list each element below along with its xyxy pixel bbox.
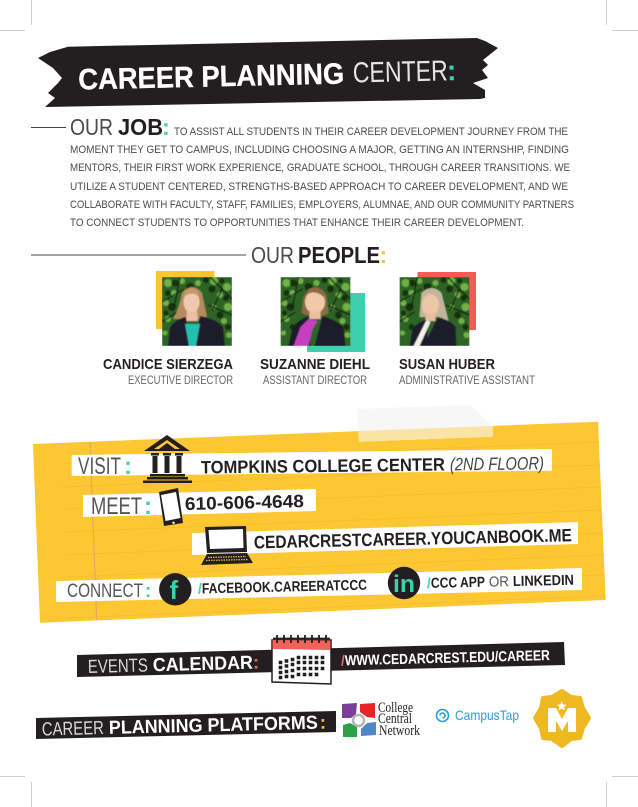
name: SUSAN HUBER — [399, 356, 495, 373]
phone number: 610-606-4648 — [185, 491, 304, 514]
linkedin handle: /CCC APPORLINKEDIN — [427, 573, 574, 592]
logo wordmark — [378, 700, 420, 739]
body text: TO ASSIST ALL STUDENTS IN THEIR CAREER DEVELOPMENT JOURNEY FROM THE — [174, 126, 568, 138]
meet colon: : — [144, 493, 152, 520]
row: meet — [83, 489, 316, 520]
body text: UTILIZE A STUDENT CENTERED, STRENGTHS-BASED APPROACH TO CAREER DEVELOPMENT, AND WE — [70, 181, 568, 193]
logo wordmark: College — [378, 700, 413, 716]
person: Candice Sierzega — [103, 271, 233, 387]
name: CANDICE SIERZEGA — [103, 356, 233, 373]
logo: CampusTap — [436, 707, 519, 723]
section: our people heading: : — [380, 242, 387, 268]
address: TOMPKINS COLLEGE CENTER(2ND FLOOR) — [201, 453, 544, 477]
logo: College Central Network — [342, 700, 420, 739]
section: our people heading: OUR — [251, 242, 294, 268]
person: Suzanne Diehl — [260, 277, 370, 387]
icon: facebook — [159, 573, 192, 606]
section: our people heading: PEOPLE — [298, 242, 380, 268]
row: visit — [72, 449, 552, 480]
photo — [162, 277, 232, 346]
icon: facebook: f — [170, 575, 178, 605]
section: our job — [31, 114, 170, 140]
title colon: : — [446, 55, 457, 87]
heading: our job: JOB — [118, 114, 163, 140]
heading: our job: OUR — [70, 114, 113, 140]
events url: /WWW.CEDARCREST.EDU/CAREER — [341, 648, 551, 669]
row: connect — [56, 568, 582, 602]
margin line — [90, 442, 97, 620]
row: book online — [192, 522, 578, 555]
visit label: VISIT — [78, 453, 121, 480]
logo wordmark: Network — [379, 723, 420, 739]
facebook handle: /FACEBOOK.CAREERATCCC — [198, 578, 368, 597]
title text: center: CENTER — [352, 55, 448, 89]
connect colon: : — [145, 581, 151, 602]
icon: phone — [159, 488, 183, 526]
icon: building — [143, 435, 192, 483]
logo: CampusTap: CampusTap — [455, 707, 519, 723]
meet label: MEET — [91, 493, 142, 520]
photo — [280, 277, 350, 346]
photo — [400, 277, 470, 346]
body text: TO CONNECT STUDENTS TO OPPORTUNITIES THAT ENHANCE THEIR CAREER DEVELOPMENT. — [70, 217, 524, 229]
visit colon: : — [124, 453, 132, 480]
title banner — [38, 38, 498, 107]
logo wordmark: Central — [378, 711, 412, 727]
logo: M badge — [535, 691, 589, 746]
icon: laptop — [201, 526, 253, 565]
icon: linkedin — [388, 567, 420, 599]
booking url: CEDARCRESTCAREER.YOUCANBOOK.ME — [254, 525, 572, 552]
heading: our job: : — [162, 114, 170, 140]
body text: COLLABORATE WITH FACULTY, STAFF, FAMILIES, EMPLOYERS, ALUMNAE, AND OUR COMMUNITY PARTNERS — [70, 199, 574, 211]
role: EXECUTIVE DIRECTOR — [128, 375, 233, 387]
section: our people heading — [31, 242, 387, 268]
name: SUZANNE DIEHL — [260, 356, 370, 373]
icon: linkedin: in — [393, 571, 415, 598]
events calendar bar — [77, 642, 565, 678]
role: ASSISTANT DIRECTOR — [263, 375, 367, 387]
body text: MOMENT THEY GET TO CAMPUS, INCLUDING CHOOSING A MAJOR, GETTING AN INTERNSHIP, FINDING — [70, 144, 569, 156]
events label: EVENTSCALENDAR: — [88, 653, 259, 678]
career planning platforms bar: CAREERPLANNING PLATFORMS: — [42, 713, 326, 740]
role: ADMINISTRATIVE ASSISTANT — [399, 375, 535, 387]
tape — [357, 405, 493, 442]
body text: MENTORS, THEIR FIRST WORK EXPERIENCE, GRADUATE SCHOOL, THROUGH CAREER TRANSITIONS. WE — [70, 162, 570, 174]
title text: CAREER PLANNING — [78, 57, 345, 96]
person: Susan Huber — [399, 272, 535, 387]
panel: yellow note paper — [33, 405, 606, 623]
body text — [70, 126, 574, 229]
icon: calendar — [272, 635, 331, 684]
connect label: CONNECT — [67, 581, 143, 602]
